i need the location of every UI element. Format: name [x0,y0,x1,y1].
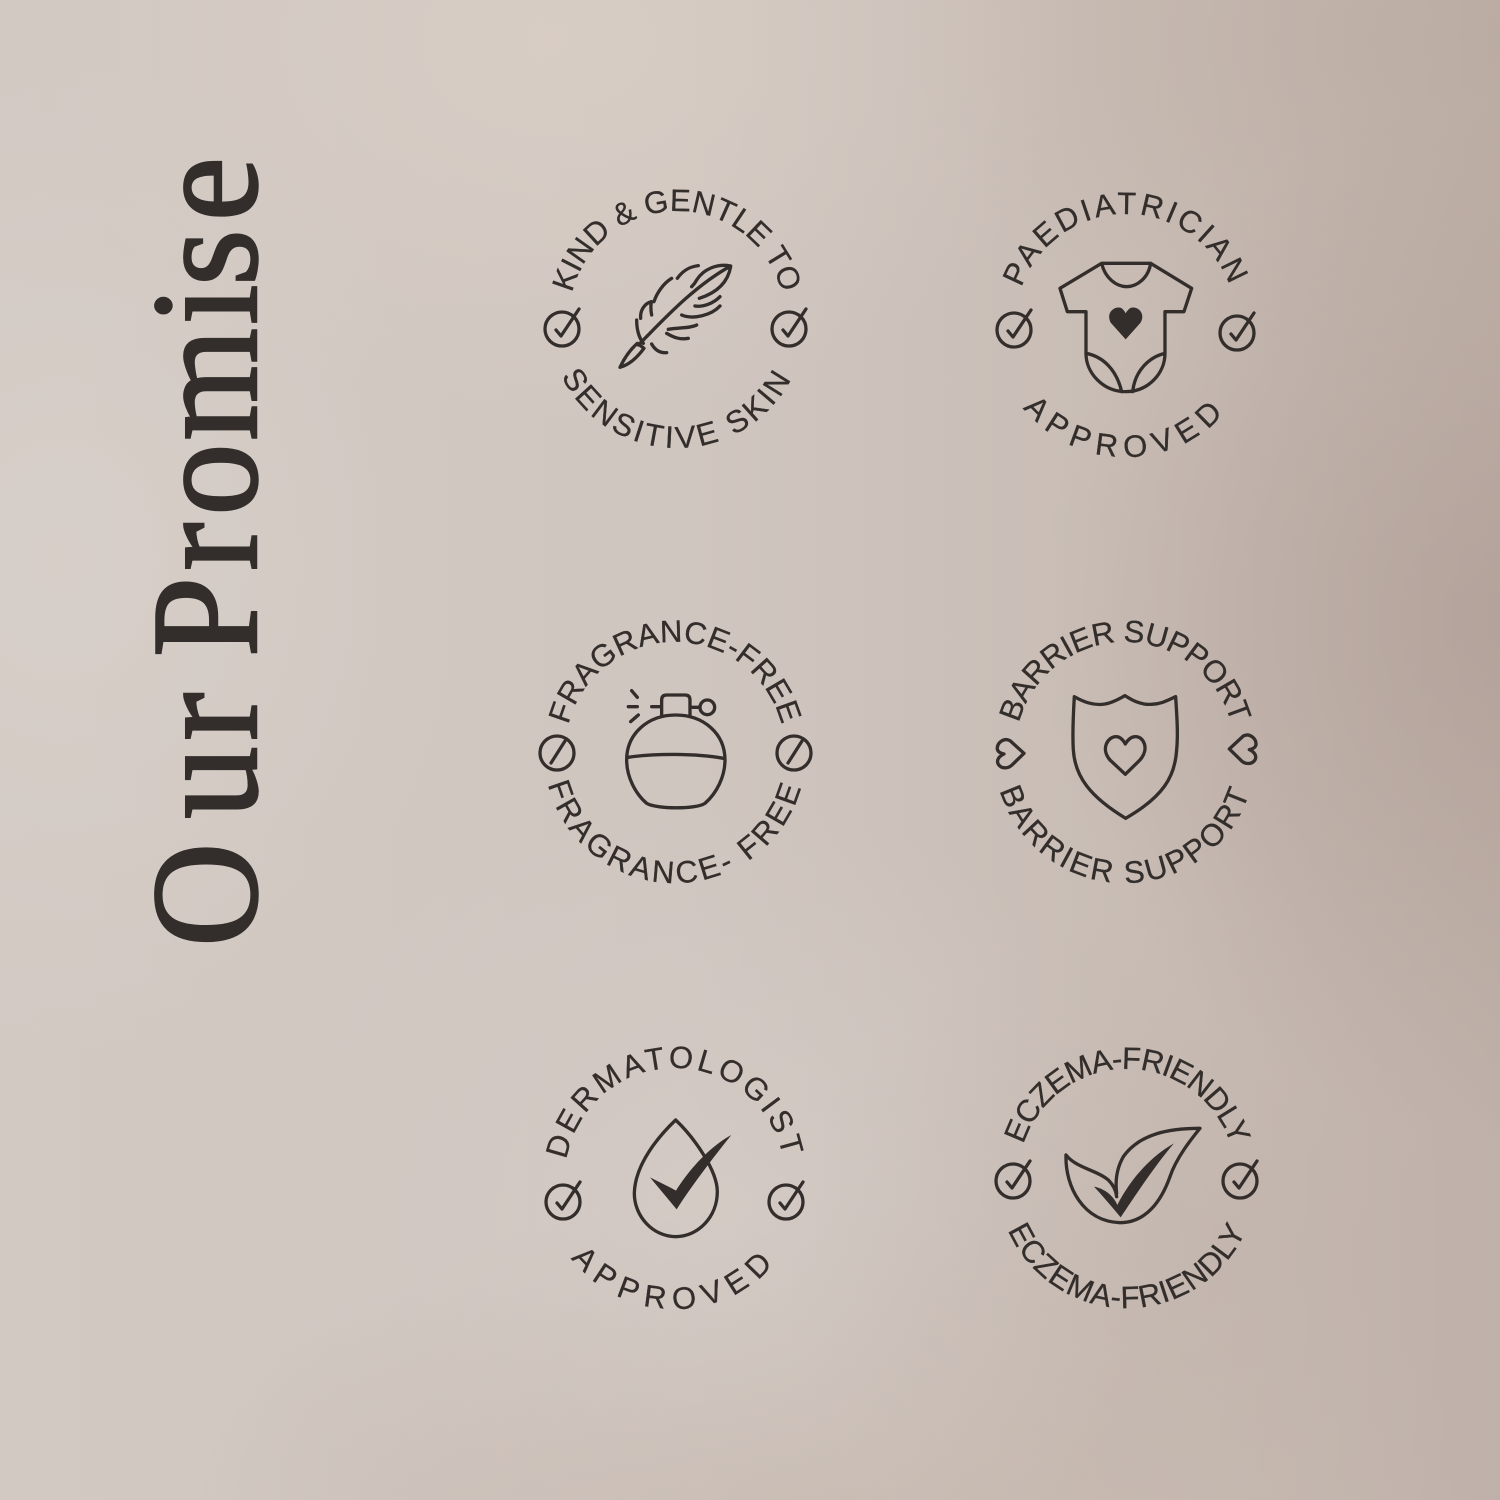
badge text: top: BARRIER SUPPORT [999,620,1252,721]
icon: right ban [777,736,811,770]
badge: kind and gentle [543,189,808,448]
icon: drop with check [634,1120,731,1237]
badge text: bottom: APPROVED [1022,399,1219,458]
badge text: bottom: SENSITIVE SKIN [564,369,790,448]
icon: left heart [997,740,1024,768]
icon: baby bodysuit [1060,263,1192,392]
icon: left check [545,309,579,346]
icon: right check [1220,313,1254,350]
badge: fragrance free [538,620,813,884]
badge: eczema friendly [994,1047,1259,1308]
badge: barrier support [996,620,1258,884]
badge text: top: FRAGRANCE-FREE [548,620,802,724]
badge: dermatologist approved [544,1046,805,1310]
badge text: top: ECZEMA-FRIENDLY [1004,1047,1252,1142]
icon: feather [620,265,731,367]
icon: right check [769,1182,803,1219]
badge text: top: DERMATOLOGIST [546,1046,804,1158]
title: Our Promise [122,157,290,947]
icon: right heart [1229,735,1256,763]
badge text: top: PAEDIATRICIAN [1002,192,1248,286]
badge text: bottom: ECZEMA-FRIENDLY [1008,1221,1242,1308]
icon: leaf with check [1066,1128,1200,1223]
badge text: bottom: BARRIER SUPPORT [1000,784,1247,884]
icon: perfume bottle [627,691,725,808]
badge: paediatrician approved [995,192,1256,458]
icon: left check [997,310,1031,347]
badge text: top: KIND & GENTLE TO [552,189,800,291]
badge text: bottom: FRAGRANCE- FREE [548,780,801,884]
icon: right check [1223,1161,1257,1198]
icon: left ban [540,736,574,770]
icon: shield with heart [997,696,1256,818]
icon: right check [772,309,806,346]
icon: left check [546,1182,580,1219]
badge text: bottom: APPROVED [570,1250,768,1310]
icon: left check [996,1161,1030,1198]
